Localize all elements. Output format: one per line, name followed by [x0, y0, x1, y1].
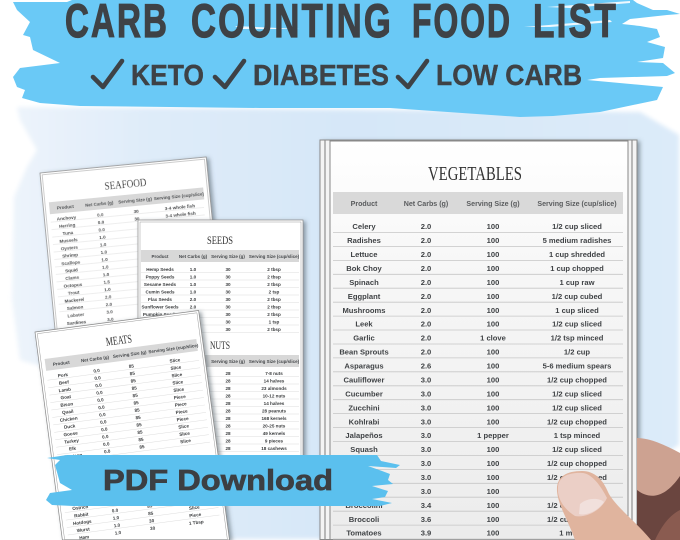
panel: meats sheet: 85 [136, 422, 142, 428]
panel: meats sheet: Lamb [58, 387, 71, 393]
icon: hand holding sheet [557, 438, 680, 540]
panel: seafood sheet: 1.0 [100, 249, 108, 255]
panel: seeds and nuts sheet: 2 tbsp [267, 297, 281, 302]
panel: seeds and nuts sheet: 28 [225, 431, 231, 436]
panel: meats sheet: Hotdogs [73, 519, 92, 526]
panel: seafood sheet: Oysters [61, 245, 79, 251]
panel: seeds and nuts sheet: Serving Size (g) [211, 359, 245, 364]
panel: meats sheet: 0.0 [103, 441, 110, 447]
table rows: 3.0 [421, 487, 431, 496]
panel: seeds and nuts sheet: 28 peanuts [262, 408, 286, 414]
panel: seeds and nuts sheet: 28 [225, 438, 231, 444]
panel: meats sheet: 85 [129, 371, 136, 376]
panel: seafood sheet: Squid [65, 267, 78, 274]
panel: meats sheet: Serving Size (cup/slice) [148, 343, 199, 354]
panel: seeds and nuts sheet: 28 [225, 386, 231, 391]
panel: seeds and nuts sheet: 30 [225, 297, 231, 302]
panel: meats sheet: 85 [147, 503, 153, 509]
table rows: 100 [487, 264, 499, 273]
panel: meats sheet: Bison [60, 401, 74, 408]
panel: seeds and nuts sheet: 1.0 [190, 267, 197, 272]
panel: meats sheet: Elk [69, 446, 77, 452]
panel: meats sheet: Beef [59, 379, 70, 386]
panel: meats sheet: Piece [176, 416, 189, 422]
table rows: Bok Choy [346, 264, 382, 273]
thumbnail [558, 473, 607, 516]
panel: seafood sheet: Net Carbs (g) [85, 200, 114, 208]
table rows: Squash [350, 445, 378, 454]
table rows: 100 [487, 445, 499, 454]
panel: seeds and nuts sheet: 28 [225, 401, 231, 406]
subtitle: keto, diabetes, low carb [93, 60, 582, 92]
panel: seeds and nuts sheet: Sesame Seeds [144, 282, 177, 287]
panel: meats sheet: Slice [170, 365, 182, 371]
panel: meats sheet: 85 [134, 407, 140, 413]
table rows: 2.0 [421, 236, 431, 245]
table rows: Bean Sprouts [339, 348, 389, 357]
thumbnail lunula [579, 499, 604, 514]
table rows: 100 [487, 236, 499, 245]
panel: meats sheet: Venison [64, 452, 83, 460]
table rows: 3.6 [421, 515, 431, 524]
panel: seafood sheet: Sardines [67, 319, 87, 326]
table rows: 100 [487, 417, 499, 426]
table rows: Zucchini [348, 403, 380, 412]
panel: seafood sheet: 3-4 whole fish [165, 211, 196, 219]
panel: meats sheet: 0.0 [94, 375, 101, 381]
panel: meats sheet: Whole [186, 497, 201, 504]
panel: meats sheet: Rabbit [74, 512, 89, 518]
panel: seafood sheet: Serving Size (g) [118, 196, 153, 205]
panel: seafood sheet: 30 [134, 216, 140, 222]
table rows: 2.6 [421, 362, 431, 370]
panel: seeds and nuts sheet: 2 tsp [269, 290, 280, 294]
table rows: 100 [487, 306, 499, 315]
table rows: Lettuce [350, 250, 378, 259]
panel: meats sheet: 85 [137, 429, 143, 435]
panel: meats sheet: Piece [174, 401, 187, 408]
panel: meats sheet: Piece [189, 512, 202, 518]
table rows: 2.0 [421, 264, 431, 273]
panel: meats sheet: Quail [62, 409, 74, 415]
panel: seeds and nuts sheet: 2 tbsp [267, 304, 281, 310]
panel: seeds and nuts sheet: 1 tsp [269, 320, 280, 324]
table rows: 5 medium radishes [543, 236, 611, 245]
panel: seafood sheet: 1.0 [103, 272, 110, 277]
panel: seeds and nuts sheet: 28 [225, 408, 231, 414]
panel: seeds and nuts sheet: 14 halves [264, 378, 285, 384]
panel: seeds and nuts sheet: Product [151, 254, 169, 259]
table header: Net Carbs (g) [404, 200, 449, 208]
table rows: 1 cup chopped [550, 264, 604, 273]
panel: seafood sheet: Anchovy [57, 215, 77, 222]
panel: seeds and nuts sheet: Poppy Seeds [146, 274, 175, 280]
panel: meats sheet: Slice [171, 372, 183, 378]
panel: seeds and nuts sheet: Pumpkin Seeds [143, 312, 178, 317]
panel: meats sheet: 85 [131, 385, 137, 391]
panel: seafood sheet: 1.5 [103, 279, 111, 285]
panel: seeds and nuts sheet: 28 [225, 416, 231, 421]
panel: meats sheet: Serving Size (g) [113, 350, 147, 359]
panel: seeds and nuts sheet: 9 pieces [265, 438, 284, 444]
heading: meats: MEATS [105, 331, 133, 349]
table rows: 2.0 [421, 320, 431, 329]
table rows: 1/2 cup sliced [552, 320, 602, 329]
panel: meats sheet: 85 [139, 444, 145, 450]
table rows: 3.4 [421, 501, 432, 510]
table rows: 3.0 [421, 459, 431, 468]
panel: meats sheet [35, 310, 230, 540]
table rows: 1/2 cup chopped [547, 501, 607, 510]
table rows: 3.0 [421, 431, 431, 440]
table header: Serving Size (cup/slice) [537, 200, 617, 208]
panel: seeds and nuts sheet: Flax Seeds [148, 297, 172, 302]
table rows: 1/2 cup chopped [547, 473, 607, 482]
panel: seeds and nuts sheet: 2.0 [190, 297, 197, 302]
panel: meats sheet: 0.0 [100, 419, 107, 425]
panel: meats sheet: 30 [149, 518, 155, 524]
panel: seafood sheet: 3-4 whole fish [165, 203, 195, 211]
table rows: 100 [487, 292, 499, 301]
panel: seeds and nuts sheet: 168 kernels [261, 416, 287, 421]
table rows: 1/2 cup chopped [547, 376, 607, 384]
table rows: 1 cup raw [559, 278, 595, 287]
table rows: 5-6 medium spears [543, 362, 611, 370]
panel: seafood sheet: Mackerel [64, 297, 84, 304]
table rows: Radishes [347, 236, 381, 245]
panel: seeds and nuts sheet: Cumin Seeds [145, 290, 175, 294]
banner: title brush stroke [13, 0, 680, 117]
panel: seeds and nuts sheet: 14 halves [264, 401, 285, 406]
table rows: 3.0 [421, 473, 431, 482]
table rows: Cauliflower [344, 376, 385, 384]
table rows: 1 clove [480, 334, 506, 343]
icon: check diabetes [215, 61, 244, 87]
table rows: 100 [487, 376, 499, 384]
panel: seafood sheet: 30 [133, 209, 139, 214]
panel: seeds and nuts sheet: 30 [225, 312, 231, 317]
table rows: Asparagus [344, 362, 384, 370]
panel: seafood sheet: 1.0 [102, 264, 109, 270]
icon: check keto [93, 61, 122, 87]
panel: seeds and nuts sheet: 23 almonds [261, 386, 287, 391]
panel: seeds and nuts sheet: 28 [225, 394, 231, 398]
panel: meats sheet: Goose [63, 430, 78, 437]
table rows: Spinach [349, 278, 379, 287]
table rows: 100 [487, 320, 499, 329]
table rows: 3.9 [421, 529, 431, 538]
panel: meats sheet: Net Carbs (g) [81, 355, 110, 363]
panel: meats sheet: 1.0 [114, 530, 122, 536]
table rows: Garlic [353, 334, 375, 343]
heading: seafood: SEAFOOD [104, 175, 147, 193]
panel: seeds and nuts sheet: 28 [225, 424, 231, 428]
panel: seeds and nuts sheet: 30 [225, 290, 231, 294]
panel: seafood sheet: 1.0 [99, 234, 106, 240]
panel: meats sheet: Chicken [59, 416, 78, 423]
panel: meats sheet: 0.0 [93, 368, 101, 374]
table rows: 100 [487, 529, 499, 538]
heading: nuts: NUTS [210, 338, 230, 352]
panel: meats sheet: 85 [132, 393, 138, 398]
table rows: 100 [487, 348, 499, 357]
table header: Serving Size (g) [466, 200, 520, 208]
panel: meats sheet: Pork [57, 372, 69, 378]
panel: seafood sheet: 2.0 [105, 294, 112, 300]
table rows: 100 [487, 487, 499, 496]
table rows: Celery [352, 222, 376, 231]
table rows: 100 [487, 250, 499, 259]
panel: meats sheet: 0.0 [111, 500, 118, 506]
table rows: 3.0 [421, 445, 431, 454]
panel: seeds and nuts sheet: 2 tbsp [267, 282, 281, 287]
panel: meats sheet: Slice [173, 387, 185, 393]
panel: seeds and nuts sheet: 18 cashews [261, 446, 287, 451]
panel: seafood sheet: Serving Size (cup/slice) [154, 191, 205, 201]
panel: meats sheet: 85 [146, 496, 152, 501]
panel: vegetables sheet [320, 140, 637, 540]
table rows: 100 [487, 389, 499, 398]
panel: meats sheet: Piece [173, 394, 186, 400]
table rows: 2.0 [421, 250, 431, 259]
panel: meats sheet: 0.0 [101, 427, 108, 432]
panel: meats sheet: Slice [169, 357, 181, 364]
label: pdf download: PDF Download [103, 465, 333, 497]
table rows: 1/2 cup sliced [552, 389, 602, 398]
table rows: 100 [487, 501, 499, 510]
table rows: 1/2 cup cubed [552, 292, 603, 301]
table rows: 3.0 [421, 376, 431, 384]
panel: meats sheet: 0.0 [98, 405, 105, 410]
table header [333, 192, 623, 214]
panel: seeds and nuts sheet: 28 [225, 378, 231, 384]
panel: seeds and nuts sheet: 1.0 [190, 282, 197, 287]
panel: seeds and nuts sheet: 49 kernels [263, 431, 286, 436]
panel: seafood sheet: Clams [65, 275, 80, 281]
table rows: 100 [487, 362, 499, 370]
panel: seeds and nuts sheet: 2.0 [190, 304, 197, 310]
panel: seeds and nuts sheet: Serving Size (cup/slice) [249, 359, 300, 364]
panel: seafood sheet: 2.0 [106, 302, 113, 307]
table rows: Tomatoes [346, 529, 382, 538]
panel: meats sheet: Turkey [64, 438, 80, 445]
panel: meats sheet: 85 [128, 363, 135, 369]
panel: seeds and nuts sheet: 28 [225, 446, 231, 451]
panel: meats sheet: Piece [175, 409, 188, 415]
panel: meats sheet: Slice [172, 379, 184, 386]
panel: seafood sheet: 0.0 [97, 212, 104, 218]
panel: meats sheet: Wurst [77, 527, 90, 533]
panel: meats sheet: Slice [189, 504, 200, 511]
icon: check low carb [398, 61, 427, 87]
panel: meats sheet: Slice [179, 431, 191, 437]
panel: seeds and nuts sheet: 10-12 nuts [263, 394, 286, 398]
panel: meats sheet: 85 [138, 437, 144, 442]
table rows: 100 [487, 403, 499, 412]
table rows: 1/2 cup chopped [547, 417, 607, 426]
table rows: Leek [355, 320, 373, 329]
table rows: 3.0 [421, 403, 431, 412]
table rows: Mushrooms [342, 306, 386, 315]
heading: seeds: SEEDS [207, 233, 233, 247]
panel: meats sheet: 85 [135, 415, 141, 420]
panel: meats sheet: Slice [178, 423, 190, 430]
table rows: 1/2 cup chopped [547, 459, 607, 468]
table rows: 1 cup sliced [555, 306, 599, 315]
panel: meats sheet: 30 [150, 525, 156, 531]
panel: meats sheet: 85 [133, 400, 139, 406]
table rows: 1 pepper [477, 431, 509, 440]
panel: seeds and nuts sheet: 30 [225, 327, 231, 332]
table rows: 100 [487, 459, 499, 468]
table rows: 2.0 [421, 292, 431, 301]
table rows: 2.0 [421, 348, 431, 357]
panel: seafood sheet: 1.0 [100, 242, 107, 248]
table rows: 3.0 [421, 389, 431, 398]
panel: seafood sheet: Mussels [59, 237, 78, 244]
panel: seeds and nuts sheet: 30 [225, 282, 231, 287]
table rows [333, 222, 623, 539]
panel: meats sheet: 0.0 [97, 397, 104, 403]
table rows: 1/2 cup sliced [552, 445, 602, 454]
panel: seeds and nuts sheet: 30 [225, 304, 231, 310]
panel: meats sheet: 0.0 [102, 434, 109, 440]
panel: seafood sheet: Salmon [67, 304, 84, 311]
panel: meats sheet: 1 Tbsp [189, 519, 204, 526]
panel: seeds and nuts sheet: 30 [225, 274, 231, 280]
panel: seafood sheet [40, 157, 235, 472]
panel: seeds and nuts sheet [138, 220, 303, 476]
table rows: Jalapeños [345, 431, 383, 440]
table rows: 100 [487, 473, 499, 482]
table rows: 2.0 [421, 278, 431, 287]
panel: seafood sheet: Herring [59, 222, 76, 229]
panel: seeds and nuts sheet: 2 tbsp [267, 274, 281, 280]
panel: seafood sheet: Octopus [63, 282, 83, 289]
panel: seeds and nuts sheet: 30 [225, 267, 231, 272]
subtitle: keto, diabetes, low carb: DIABETES [253, 60, 389, 92]
panel: seafood sheet: Product [57, 204, 75, 211]
panel: meats sheet: 0.0 [96, 390, 103, 396]
panel: seeds and nuts sheet: Net Carbs (g) [179, 254, 208, 259]
panel: seeds and nuts sheet: 20-25 nuts [263, 424, 286, 428]
panel: seafood sheet: Shrimp [62, 252, 78, 259]
table rows: 2.0 [421, 334, 431, 343]
table rows: 2.0 [421, 306, 431, 315]
panel: seeds and nuts sheet: 28 [225, 371, 231, 376]
watercolor background [12, 107, 679, 539]
title [65, 0, 618, 47]
panel: seafood sheet: Trout [68, 290, 80, 296]
table rows: 100 [487, 515, 499, 524]
subtitle: keto, diabetes, low carb: LOW CARB [436, 60, 582, 92]
panel: seeds and nuts sheet: Serving Size (cup/slice) [249, 254, 300, 259]
panel: meats sheet: 1.0 [112, 515, 120, 521]
table rows: 3.0 [421, 417, 431, 426]
panel: seafood sheet: 1.0 [104, 287, 111, 292]
table rows: 1/2 cup sliced [552, 403, 602, 412]
panel: meats sheet: 1.0 [113, 523, 121, 528]
panel: meats sheet: 0.0 [99, 412, 106, 418]
subtitle: keto, diabetes, low carb: KETO [131, 60, 204, 92]
panel: meats sheet: Product [53, 360, 71, 367]
table rows: 1 cup shredded [549, 250, 605, 259]
heading: vegetables: VEGETABLES [428, 163, 522, 185]
panel: meats sheet: 0.0 [95, 383, 102, 388]
table rows: Broccolini [345, 501, 383, 510]
table rows: 1/2 cup sliced [552, 222, 602, 231]
panel: seeds and nuts sheet: 2 tbsp [267, 312, 281, 317]
panel: meats sheet: 85 [130, 378, 137, 384]
table rows: Kohlrabi [349, 417, 379, 426]
panel: seafood sheet: Lobster [67, 312, 85, 319]
thumb [557, 471, 651, 540]
panel: seafood sheet: Tuna [62, 230, 74, 236]
table rows: Eggplant [348, 292, 381, 301]
panel: seeds and nuts sheet: 30 [225, 320, 231, 324]
table rows: 1 medium [559, 529, 595, 538]
table rows: 100 [487, 278, 499, 287]
panel: seafood sheet: 0.0 [98, 220, 105, 225]
panel: seeds and nuts sheet: 7-8 nuts [265, 371, 283, 376]
panel: meats sheet: Whole [185, 489, 200, 496]
panel: meats sheet: Slice [180, 438, 192, 444]
panel: seeds and nuts sheet: 2 tbsp [267, 327, 281, 332]
panel: seafood sheet: 0.0 [98, 227, 106, 233]
table rows: 1/2 cup [564, 348, 590, 357]
panel: meats sheet: 85 [148, 511, 154, 516]
panel: meats sheet: 0.0 [104, 449, 111, 454]
panel: meats sheet: 0.0 [112, 508, 119, 513]
panel: meats sheet: Duck [64, 423, 76, 430]
table rows: Broccoli [349, 515, 379, 524]
table rows: 100 [487, 222, 499, 231]
table rows: 1/2 cup chopped [547, 515, 607, 524]
panel: seafood sheet: 3.0 [106, 309, 113, 315]
panel: seeds and nuts sheet: 2 tbsp [267, 267, 281, 272]
panel: seeds and nuts sheet: Sunflower Seeds [141, 304, 179, 310]
panel: seafood sheet: 1.0 [101, 257, 108, 263]
panel: meats sheet: Ostrich [72, 504, 89, 511]
banner: pdf download brush stroke [46, 455, 400, 506]
table rows: 1/2 tsp minced [551, 334, 604, 343]
panel: seeds and nuts sheet: 1.0 [190, 290, 197, 294]
panel: seeds and nuts sheet: Serving Size (g) [211, 254, 245, 259]
panel: meats sheet: Goat [60, 394, 72, 400]
table header: Product [351, 200, 378, 208]
panel: seeds and nuts sheet: Hemp Seeds [146, 267, 174, 272]
table rows: 2.0 [421, 222, 431, 231]
table rows: Cucumber [345, 389, 383, 398]
panel: seafood sheet: 3.0 [107, 317, 114, 322]
panel: seafood sheet: Scallops [61, 260, 81, 266]
table rows: 1 tsp minced [554, 431, 601, 440]
panel: seeds and nuts sheet: 1.0 [190, 274, 197, 280]
